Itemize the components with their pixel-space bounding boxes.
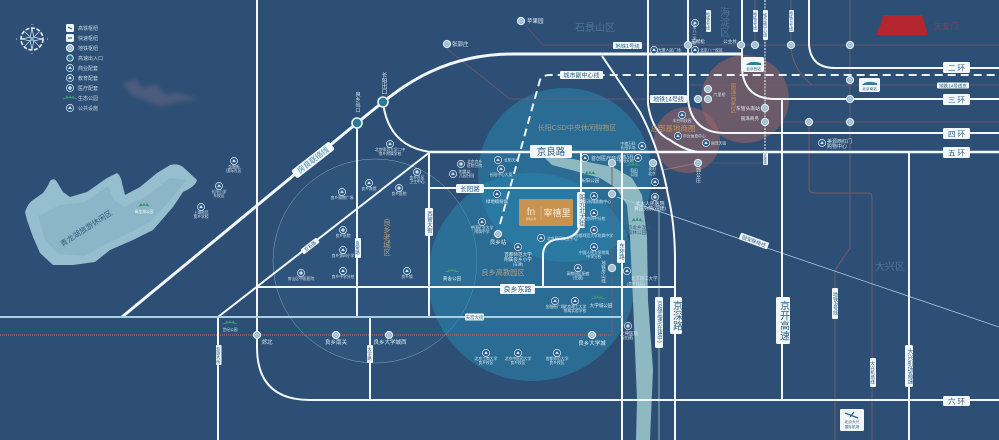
airport: Daxing International: 北京大兴 xyxy=(845,419,860,424)
park: University Town Park: 大学城公园 xyxy=(590,302,613,309)
poi: Sunshine east 2 xyxy=(583,209,606,221)
station: Shiliusong: 石榴松 xyxy=(691,38,705,45)
poi: Shangkun hospital: (在建) xyxy=(623,335,634,340)
zone labels: 良乡高教园区 xyxy=(481,268,525,277)
rail hub: Beijing West xyxy=(743,57,764,72)
legend: 公共设施 xyxy=(78,105,98,112)
poi: west 3: 良乡学校 xyxy=(193,214,209,219)
station: Lize xyxy=(741,115,769,126)
poi: Peking people's hospital xyxy=(634,193,666,212)
poi: capital normal school xyxy=(504,243,532,266)
railway: fine dotted line xyxy=(764,0,766,152)
station: Nanguan xyxy=(325,331,347,346)
legend: 高铁枢纽 xyxy=(78,25,98,32)
poi: old town 5 xyxy=(288,269,314,281)
park: Century Park xyxy=(222,320,238,332)
poi: old town 1 xyxy=(331,188,354,200)
poi: old town 6 xyxy=(332,267,355,279)
label: Daxing Airport Expressway xyxy=(905,345,913,387)
poi: Kechuang xyxy=(648,166,659,186)
label: north metro vertical 2: 地铁9号线 xyxy=(753,10,758,30)
label: University Road: 大学路 xyxy=(367,346,372,362)
poi: Kechuang: 长阳 xyxy=(648,166,656,171)
poi: school: 良乡附属学校 xyxy=(379,151,402,156)
poi: School south: 北京理工大学 xyxy=(564,304,587,309)
poi: west 2: 东校区 xyxy=(213,193,225,198)
poi: high-ed south: 高教园区配套 xyxy=(567,271,590,276)
poi: west 2 xyxy=(211,182,227,198)
label: 6th Ring: 六 环 xyxy=(948,396,966,406)
poi: Changyang mall xyxy=(494,156,519,164)
label: 6th Ring xyxy=(943,396,970,406)
label: Airport Line xyxy=(870,358,876,387)
station: Zhangguozhuang xyxy=(443,40,469,48)
label: Jingliang Road: 京良路 xyxy=(537,146,566,158)
project marker: 宰禧里: fn xyxy=(527,207,535,218)
poi: Headquarters 1: 丰台科技园 xyxy=(673,118,692,123)
project marker: 宰禧里: 宰禧里 xyxy=(543,207,571,218)
stations: north row xyxy=(751,41,854,126)
poi: capital normal school: (在建) xyxy=(513,262,524,266)
station: Liangxiang: 良乡站 xyxy=(490,238,507,246)
poi: north Changyang: 中粮万科 xyxy=(620,141,636,146)
poi: Shouchuang: 首创医疗商业 xyxy=(591,155,621,162)
label: Changyang Road: 长阳路 xyxy=(460,184,480,193)
poi: University south 2 xyxy=(505,349,531,365)
label: Liangxiang East Road xyxy=(500,284,535,294)
park: Changyang Park xyxy=(581,170,600,184)
park: riverside parks xyxy=(626,162,640,177)
park: Century Park: 世纪公园 xyxy=(222,327,238,332)
mountains decoration xyxy=(122,79,199,106)
station: University Town West: 良乡大学城西 xyxy=(373,338,407,346)
exit: Changyang: 长阳出口 xyxy=(380,71,387,96)
landmark: Tiananmen red building: 天安门 xyxy=(934,21,958,31)
poi: high-ed west xyxy=(471,218,494,234)
label: East Ring Road xyxy=(617,240,625,263)
metro Fangshan line dotted xyxy=(0,334,612,336)
poi: Plaza: 金融街广场 xyxy=(546,304,565,309)
label: north rail vertical: 城市副中心线 xyxy=(763,12,768,37)
park: Longxiang wetland park: 北京龙乡湿地 xyxy=(623,224,651,231)
label: south dotted line xyxy=(762,152,768,165)
poi: Changyang hospital: 北京良乡 xyxy=(467,159,482,164)
label: 2nd Ring xyxy=(943,62,970,73)
district names xyxy=(575,6,905,273)
circle: Lize business district xyxy=(701,55,789,143)
station: Guogongzhuang: 郭公庄 xyxy=(695,167,701,184)
label: Jingkai Expressway: 京开高速 xyxy=(778,299,790,340)
metro stations xyxy=(253,17,854,347)
road: light ring line y=317 xyxy=(0,316,622,318)
label: Daxing Airport Expressway: 大兴机场高速 xyxy=(906,347,913,385)
district names: 石景山区 xyxy=(575,22,615,34)
station: Suburb North xyxy=(253,331,273,346)
station: Liangxiang xyxy=(490,230,507,246)
station: Guogongzhuang xyxy=(694,159,702,184)
poi: Kechuang: 北京 xyxy=(648,171,656,176)
station: Zhangguozhuang: 张郭庄 xyxy=(452,40,469,48)
park: Longxiang wetland park xyxy=(623,218,651,236)
station: Liulitun xyxy=(694,85,726,103)
poi: old town 5: 房山区中医医院 xyxy=(288,276,314,281)
poi: Shijingshan school xyxy=(691,19,699,45)
label: 4th Ring xyxy=(943,128,970,139)
label: city sub-center line: 城市副中心线 xyxy=(563,72,600,80)
station: Nanguan: 良乡南关 xyxy=(325,338,347,346)
poi: Guangfang plaza xyxy=(650,46,681,54)
poi: old town 3 xyxy=(335,226,351,238)
poi: old town community: 良乡社区 xyxy=(409,175,425,180)
station: Dongguantou South xyxy=(736,104,769,112)
poi: old town hospital xyxy=(391,184,407,196)
poi: Sunshine east 4: 中学分校 xyxy=(586,254,602,259)
label: rail link xyxy=(739,233,769,250)
poi: University south 1: 良乡校区 xyxy=(478,360,494,365)
station: Liulitun: 六里桥 xyxy=(713,91,726,98)
label: Jingxiong Expressway xyxy=(655,297,663,348)
poi: old town 7: 良乡镇 xyxy=(401,274,413,279)
park: Huangshe Park xyxy=(443,268,462,282)
rail hub: Beijing West: 北京西站 xyxy=(746,66,761,71)
label: Sunshine Street: 阳光北大街 xyxy=(578,192,586,227)
poi: Peking people's hospital: 北大人民医院 xyxy=(636,200,665,207)
label: Metro Line 14 east: 地铁14号线东 xyxy=(939,82,967,90)
park: riverside parks: 稻田 xyxy=(630,168,638,173)
poi: west 2: 长阳小学 xyxy=(211,189,227,194)
poi: Headquarters 2 xyxy=(674,132,706,140)
poi: west 3: 上海师范 xyxy=(193,210,209,215)
poi: Daotian xyxy=(618,154,642,163)
circle: headquarters base district xyxy=(654,107,720,173)
station: Dongguantou South: 东管头南站 xyxy=(736,105,760,112)
label: Tiangong Road xyxy=(465,314,484,321)
label: Kaixuan Street xyxy=(215,345,222,365)
district names: 大兴区 xyxy=(875,260,905,273)
stations: Daotian area xyxy=(608,159,657,272)
zone labels: 良乡老城区 xyxy=(382,217,392,256)
label: Oblique line rotated xyxy=(300,237,320,255)
station: Shiliusong xyxy=(684,38,705,49)
legend: 快速枢纽 xyxy=(78,35,98,42)
poi: Shijingshan school: 北京八一学校 xyxy=(692,21,697,45)
poi: Shouchuang xyxy=(581,154,621,162)
poi: University south 2: 北京中医药大学 xyxy=(505,356,531,361)
poi: Headquarters 1 xyxy=(673,111,692,123)
station: Liangxiang University Town: 良乡大学城 xyxy=(578,339,606,347)
zone labels: 丽泽商务区 xyxy=(729,83,736,113)
poi: Xihongmen xyxy=(818,138,852,150)
panel: Qinglong Lake scenic area xyxy=(25,164,197,265)
label: Jingshen Road: 京深路 xyxy=(670,299,682,331)
legend: 商业配套 xyxy=(78,65,98,72)
lake label: 青龙湖旅游休闲区 xyxy=(58,207,114,249)
poi: Bayi school: 北京八一校区 xyxy=(700,48,723,52)
poi: Guangfang plaza: 光景人民广场 xyxy=(658,48,681,52)
legend xyxy=(63,24,103,112)
label: 3rd Ring xyxy=(943,94,970,105)
project marker: 宰禧里: 悦隽系列 xyxy=(526,217,537,221)
label: expressway xyxy=(291,141,335,179)
label: Metro Line 1: 地铁1号线 xyxy=(615,42,640,50)
thin rail lines xyxy=(617,197,999,440)
poi: University south 2: 良乡校区 xyxy=(510,360,526,365)
label: Xiguan Street: 西管大街 xyxy=(426,211,433,234)
legend: 地铁枢纽 xyxy=(78,45,98,52)
station: University Town West xyxy=(373,331,407,346)
poi: University south 3: 首都师范大学 xyxy=(546,356,569,361)
zone labels: 长阳CSD中央休闲购物区 xyxy=(538,123,616,132)
poi: Sunshine east 3: 首都师范大学附属中学 xyxy=(575,233,613,238)
poi: school: 北京师范大学二中 xyxy=(375,147,405,152)
poi: Beijing Normal xyxy=(623,267,658,286)
station: Gongzhufen xyxy=(723,38,745,49)
station: Pingguoyuan: 苹果园 xyxy=(527,17,544,25)
poi: west: 金融街 xyxy=(228,164,240,169)
poi: Changyang school: 附属幼 xyxy=(459,169,471,174)
station: Pingguoyuan xyxy=(517,17,544,25)
exit: Changyang xyxy=(378,71,388,107)
poi: west: 国际社区 xyxy=(226,168,242,173)
exit: Liangxiang xyxy=(352,90,362,128)
poi: old town 7 xyxy=(401,267,413,279)
label: north metro vertical 3: 地铁10号线 xyxy=(789,9,794,31)
airport: Daxing International: 国际机场 xyxy=(845,424,860,429)
poi: old town community xyxy=(409,168,425,184)
poi: Daotian: 长阳天地 xyxy=(618,158,634,163)
poi: Changyang hospital xyxy=(457,159,482,168)
poi: Changyang mall: 长阳天地 xyxy=(504,158,519,162)
poi: Sunshine east 4: 中国人民大学附属 xyxy=(579,250,609,255)
circle: Changyang CSD xyxy=(478,88,652,262)
poi: old town 2 xyxy=(361,179,377,191)
poi: west xyxy=(226,157,242,173)
poi: Xinghe plaza: 北京星河商业中心 xyxy=(547,236,578,241)
park: Longxiang wetland park: 森林公园 xyxy=(628,229,647,236)
rail hub: Beijing South: 北京南站 xyxy=(862,86,877,91)
label: University Road xyxy=(367,345,373,363)
poi: University south 1 xyxy=(475,349,498,365)
label: 2nd Ring: 二 环 xyxy=(948,64,966,72)
poi: University south 3: 良乡校区 xyxy=(549,360,565,365)
label: Fangshan Line vertical: 地铁房山线 xyxy=(601,260,606,284)
poi: Changyang school xyxy=(449,169,474,178)
poi: Shangkun hospital: 上坤医院 xyxy=(620,330,639,337)
label: Jingkai Expressway xyxy=(776,297,790,344)
poi: old town 2: 良乡宾馆 xyxy=(361,186,377,191)
station: Suburb North: 郊北 xyxy=(261,338,273,346)
label: Jingxiong Expressway: 京雄高速(在建中) xyxy=(656,300,663,343)
label: Metro Line 14 xyxy=(650,95,687,103)
poi: Plaza xyxy=(546,297,565,309)
poi: Bayi school xyxy=(691,46,723,54)
label: Xiliang Road xyxy=(355,238,361,258)
poi: Xihongmen: 美源西红门 xyxy=(827,138,852,145)
label: Kaixuan Street: 凯旋大街 xyxy=(215,345,221,365)
park: Qinglong Lake Park: 青龙湖公园 xyxy=(135,209,154,214)
poi: high-ed south: (在建) xyxy=(573,275,584,280)
poi: high-ed south xyxy=(567,264,590,280)
label: Metro Line 14: 地铁14号线 xyxy=(653,95,684,103)
label: 3rd Ring: 三 环 xyxy=(948,96,966,104)
park: riverside parks: 公园 xyxy=(630,172,638,177)
landmark: Tiananmen red building xyxy=(876,15,958,35)
legend: 医疗配套 xyxy=(78,85,98,92)
poi: capital normal school: 首都师范大学 xyxy=(504,251,532,258)
poi: Beijing Normal: (良乡校区) xyxy=(627,281,645,286)
label: Oblique line rotated: 京石路 xyxy=(303,239,318,253)
label: north metro vertical 1: 地铁6号线 xyxy=(706,10,711,30)
poi: Shangkun hospital xyxy=(620,322,639,340)
poi: north Changyang xyxy=(620,141,646,150)
poi: Changyang center: 长阳中心大厦 xyxy=(490,172,513,177)
park: Changyang Park: 长阳公园 xyxy=(581,177,600,184)
poi: School south: 附属实验学校 xyxy=(564,308,587,313)
poi: old town 3: 良乡医院 xyxy=(335,233,351,238)
river xyxy=(543,156,653,440)
label: Changyang Road xyxy=(456,184,484,193)
poi: old town 1: 良乡购物广场 xyxy=(331,195,354,200)
label: Metro Line 14 east xyxy=(937,82,969,90)
poi: Sunshine east 4 xyxy=(579,243,609,259)
park: Qinglong Lake Park xyxy=(135,202,154,214)
poi: north Changyang: 长阳半岛 xyxy=(620,145,636,150)
park: Huangshe Park: 黄舍公园 xyxy=(443,275,462,282)
legend: 教育配套 xyxy=(78,75,98,82)
poi: high-ed west: 附属中学 xyxy=(474,229,490,234)
label: rail link: 固安联络线 xyxy=(741,234,767,249)
label: Jingliang Road xyxy=(530,145,572,158)
poi: old town 4: 良乡第四小学 xyxy=(332,253,355,258)
poi: Daotian: 中粮万科 xyxy=(618,154,634,159)
facility markers xyxy=(135,19,852,365)
airport: Daxing International xyxy=(840,409,864,431)
poi: Sunshine east 3 xyxy=(575,226,613,238)
compass xyxy=(16,24,48,54)
label: 4th Ring: 四 环 xyxy=(948,130,966,138)
circle: higher education park xyxy=(428,173,636,381)
poi: Xihongmen: 购物中心 xyxy=(827,143,847,150)
railway: city sub-center line xyxy=(500,75,999,224)
circle: old town district xyxy=(273,159,477,363)
label: Tiangong Road: 天宫大街 xyxy=(466,314,484,321)
label: Airport Line: 大兴机场线 xyxy=(870,360,876,384)
poi: west 3 xyxy=(193,203,209,219)
label: city sub-center line xyxy=(560,71,603,80)
label: expressway: 房良联络线 xyxy=(295,144,331,175)
legend: 高速出入口 xyxy=(78,55,103,62)
station: Lize: 丽泽商务 xyxy=(741,115,759,122)
poi: old town hospital: 良乡医院 xyxy=(391,191,407,196)
poi: old town 4 xyxy=(332,246,355,258)
poi: capital normal school: 附属良乡小学 xyxy=(504,256,532,263)
zone labels: 总部基地商圈 xyxy=(650,123,696,133)
label: East Ring Road: 东环路 xyxy=(618,242,625,261)
label: Xiguan Street xyxy=(425,208,433,236)
station: Liangxiang University Town xyxy=(578,331,606,347)
label: Liangxiang East Road: 良乡东路 xyxy=(504,284,532,294)
poi: Beijing Normal: 北京理工大学 xyxy=(631,275,658,282)
district names: 海淀区 xyxy=(718,6,730,37)
poi: Headquarters 3: 丽泽天街 xyxy=(711,140,726,146)
poi: school xyxy=(375,140,405,156)
station: Gongzhufen: 公主坟 xyxy=(723,38,737,45)
poi: Xinghe plaza xyxy=(537,234,578,242)
poi: Sunshine east 2: 北京四中分校 xyxy=(583,216,606,221)
poi: Lvdi mall xyxy=(486,190,509,205)
label: Metro Line 1 xyxy=(613,42,642,50)
poi: Sunshine east 1 xyxy=(577,192,611,204)
poi: School south xyxy=(564,297,587,313)
exit: Liangxiang: 良乡出口 xyxy=(354,90,361,114)
project marker: 宰禧里 xyxy=(519,199,573,226)
poi: Changyang hospital: 医院分院 xyxy=(467,163,482,168)
legend: 生态公园 xyxy=(78,95,98,102)
poi: University south 3 xyxy=(546,349,569,365)
poi: Sunshine east 1: 长阳万科城购物中心 xyxy=(577,199,611,204)
zone labels xyxy=(382,83,736,277)
poi: Changyang school: 儿园分园 xyxy=(459,173,474,178)
poi: University south 1: 北京工商大学 xyxy=(475,356,498,361)
poi: Lvdi mall: 绿地缤纷城 xyxy=(486,198,509,205)
label: 5th Ring: 五 环 xyxy=(948,148,966,158)
poi: high-ed west: 中国矿业大学 xyxy=(471,225,494,230)
poi: old town community: 卫生中心 xyxy=(409,179,425,184)
label: Metro Line 4: 地铁4号线 xyxy=(832,292,838,315)
label: Xiliang Road: 良常路 xyxy=(355,240,360,256)
poi: Peking people's hospital: 黄庄分院(在建) xyxy=(634,205,666,212)
poi: Headquarters 3 xyxy=(702,139,726,147)
poi: Headquarters 2: 丰台体育中心 xyxy=(683,134,706,138)
rail hub: Beijing South xyxy=(859,78,880,92)
park: University Town Park xyxy=(590,294,613,309)
metro lines xyxy=(447,0,999,440)
poi: old town 6: 良乡中学分校 xyxy=(332,274,355,279)
poi: Changyang center xyxy=(490,165,513,177)
label: south dotted line: 京港澳 xyxy=(762,152,768,164)
label: 5th Ring xyxy=(943,147,970,158)
road labels xyxy=(215,9,970,406)
